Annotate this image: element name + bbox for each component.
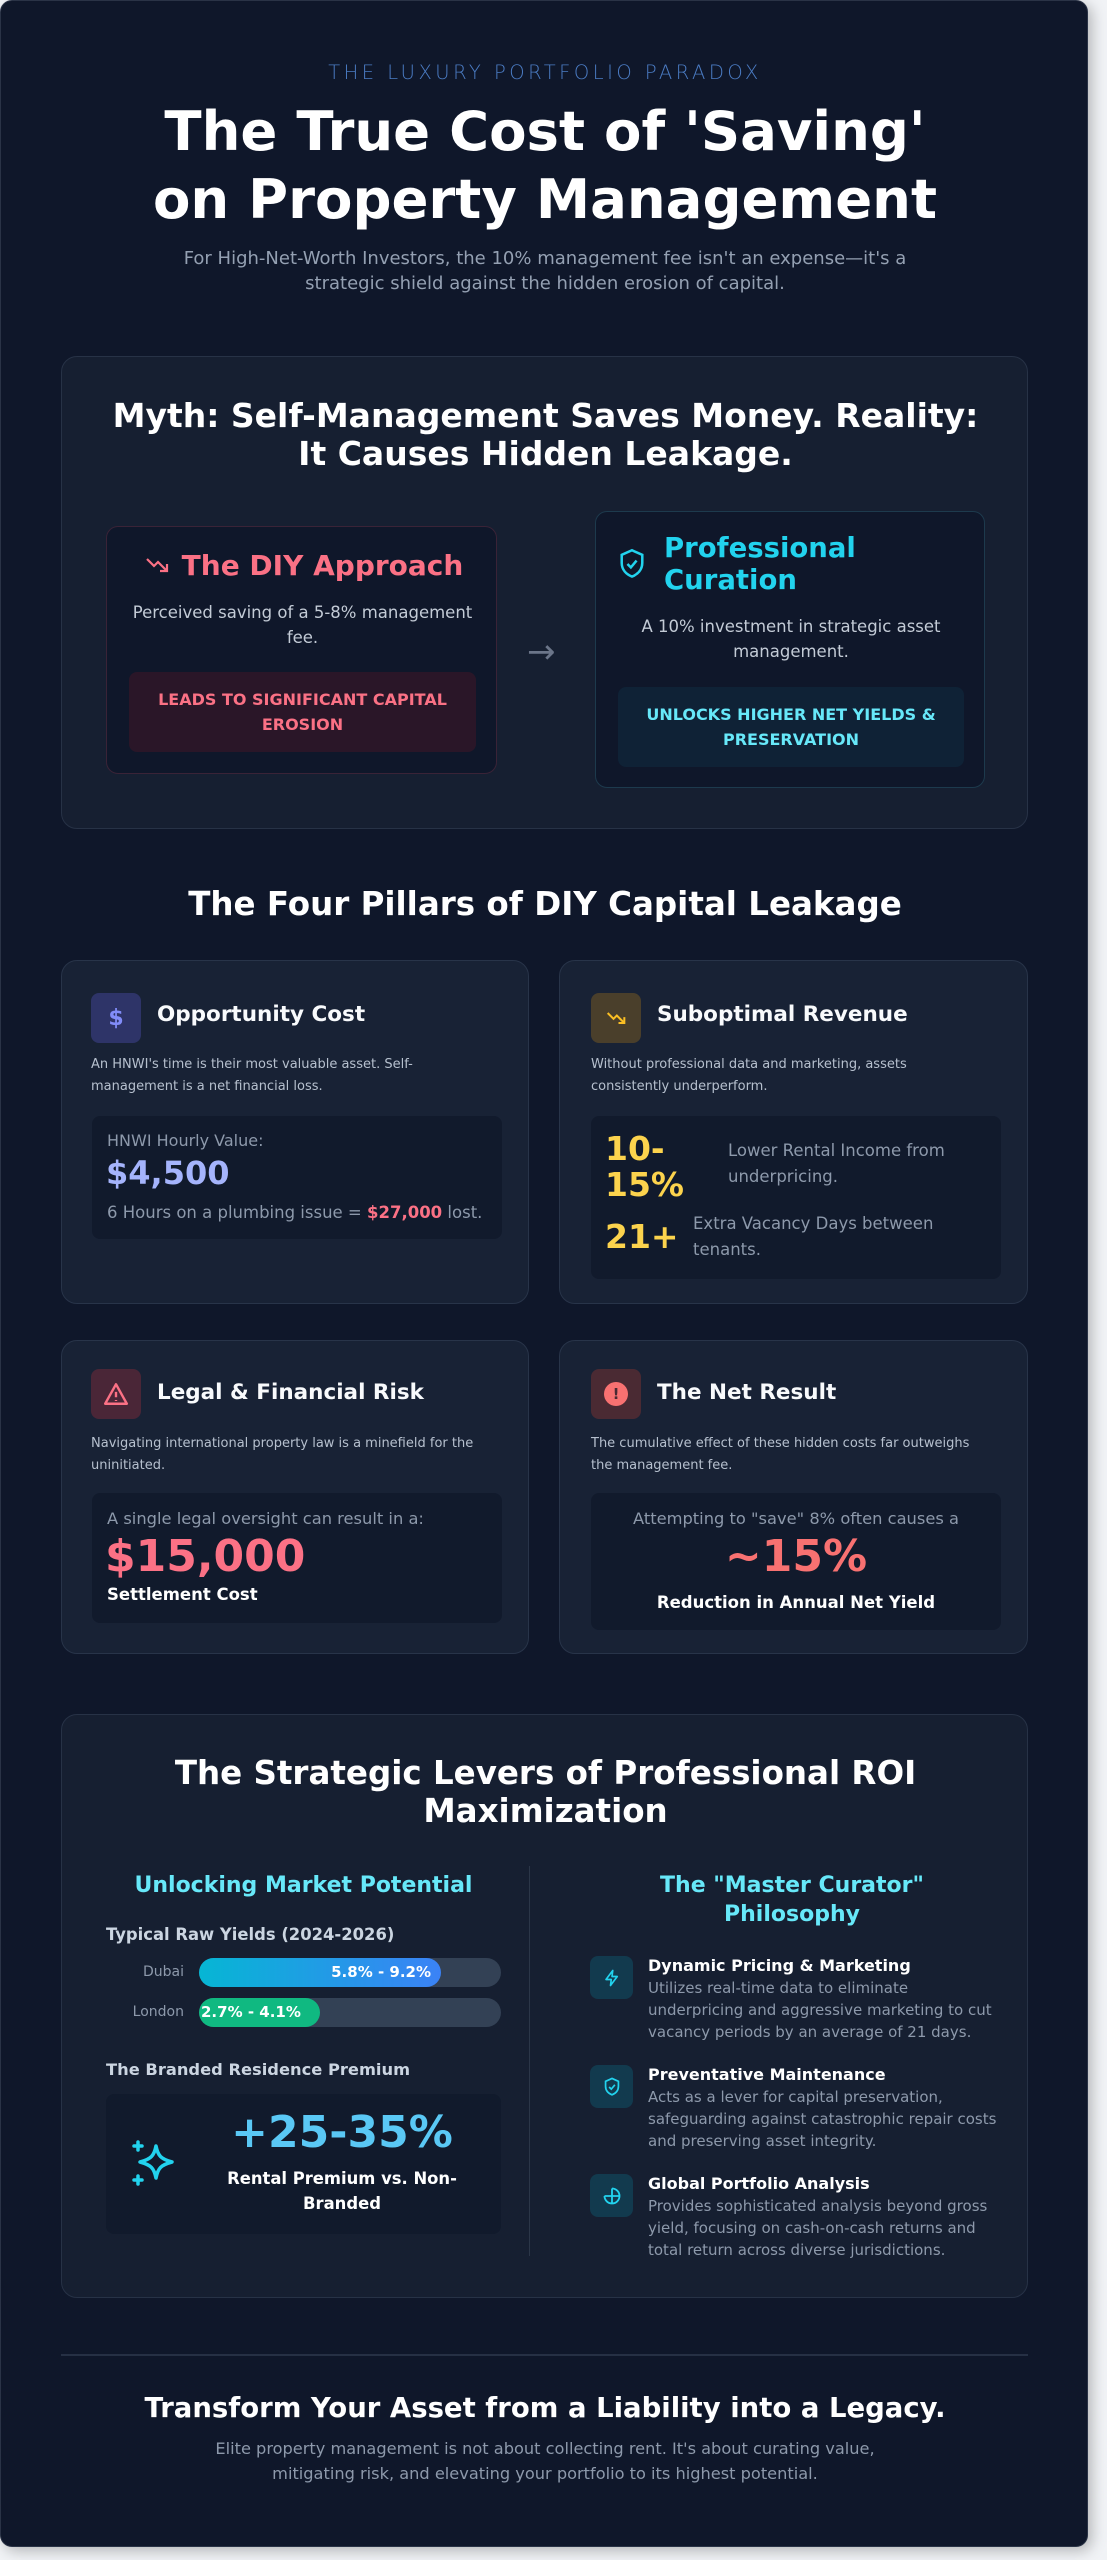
footer text (215, 2439, 875, 2483)
title: The Net Result (657, 1380, 836, 1405)
footer text: mitigating risk, and elevating your portfolio to its highest potential. (272, 2464, 818, 2483)
item: global portfolio: Global Portfolio Analysis (648, 2174, 870, 2193)
DIY tag (129, 672, 476, 752)
icon: dollar: $ (108, 1006, 124, 1030)
stat box: 21+ (605, 1217, 679, 1256)
title: on Property Management (153, 167, 937, 231)
stat box: tenants. (693, 1240, 761, 1259)
item: preventative maintenance: Acts as a lever for capital preservation, safeguarding against catastrophic repair costs and preserving asset integrity. (648, 2088, 996, 2150)
item: global portfolio: Provides sophisticated analysis beyond gross yield, focusing on cash-on-cash returns and total return across diverse jurisdictions. (648, 2197, 987, 2259)
panel: net result (559, 1340, 1028, 1654)
column heading: The "Master Curator" (660, 1873, 924, 1898)
premium box: Rental Premium vs. Non- (227, 2169, 457, 2188)
eyebrow label: THE LUXURY PORTFOLIO PARADOX (328, 61, 762, 84)
yields label: Typical Raw Yields (2024-2026) (106, 1925, 394, 1944)
pro title (664, 532, 856, 596)
column heading: Philosophy (724, 1902, 860, 1927)
myth heading (113, 396, 978, 473)
bar chart: Dubai (143, 1964, 184, 1980)
icon: shield (590, 2065, 633, 2108)
icon: alert: ! (613, 1385, 619, 1403)
icon: lightning (590, 1956, 633, 1999)
panel: opportunity cost (61, 960, 529, 1304)
stat box (92, 1493, 502, 1623)
desc: Navigating international property law is a minefield for the uninitiated. (91, 1436, 473, 1473)
stat box: Reduction in Annual Net Yield (657, 1593, 935, 1612)
title: Opportunity Cost (157, 1002, 365, 1027)
stat box: underpricing. (728, 1167, 838, 1186)
premium box: +25-35% (231, 2107, 453, 2158)
desc: Without professional data and marketing, assets consistently underperform. (591, 1057, 907, 1094)
bar chart (133, 1958, 501, 2027)
panel: legal risk (61, 1340, 529, 1654)
DIY tag: EROSION (262, 715, 343, 734)
title: Legal & Financial Risk (157, 1380, 424, 1405)
subtitle (184, 248, 906, 294)
item: preventative maintenance (590, 2065, 996, 2150)
divider line (529, 1866, 530, 2256)
icon: dollar (91, 993, 141, 1043)
bar chart: 2.7% - 4.1% (201, 2003, 301, 2021)
pro text: A 10% investment in strategic asset management. (641, 617, 941, 661)
bar chart: London (133, 2004, 184, 2020)
stat box: Attempting to "save" 8% often causes a (633, 1509, 959, 1528)
icon: trend down (591, 993, 641, 1043)
pro tag (618, 687, 964, 767)
panel: myth vs reality (61, 356, 1028, 829)
branded label: The Branded Residence Premium (106, 2060, 410, 2079)
stat box: $4,500 (106, 1154, 229, 1192)
arrow: → (527, 632, 556, 672)
shield icon (620, 548, 644, 578)
item: preventative maintenance: Preventative Maintenance (648, 2065, 886, 2084)
stat box: $15,000 (105, 1531, 305, 1582)
desc: The cumulative effect of these hidden costs far outweighs the management fee. (591, 1436, 969, 1473)
heading (175, 1754, 916, 1830)
title: Suboptimal Revenue (657, 1002, 908, 1027)
icon: alert (591, 1369, 641, 1419)
stat box: A single legal oversight can result in a: (107, 1509, 424, 1528)
item: dynamic pricing: Utilizes real-time data to eliminate underpricing and aggressive marketing to cut vacancy periods by an average of 21 days. (648, 1979, 992, 2041)
footer heading: Transform Your Asset from a Liability into a Legacy. (144, 2392, 946, 2424)
stat box: Extra Vacancy Days between (693, 1214, 933, 1233)
footer text: Elite property management is not about collecting rent. It's about curating value, (215, 2439, 875, 2458)
heading: Maximization (423, 1792, 668, 1830)
myth heading: It Causes Hidden Leakage. (298, 434, 793, 473)
item: dynamic pricing (590, 1956, 992, 2041)
title (153, 99, 937, 231)
desc: An HNWI's time is their most valuable asset. Self-management is a net financial loss. (91, 1057, 413, 1094)
stat box: 6 Hours on a plumbing issue = $27,000 lost. (107, 1203, 482, 1222)
right column: master curator (590, 1873, 996, 2259)
stat box: 15% (605, 1165, 684, 1204)
title: The True Cost of 'Saving' (164, 99, 926, 163)
column heading (660, 1873, 924, 1927)
column heading: Unlocking Market Potential (134, 1873, 472, 1898)
icon: globe (590, 2174, 633, 2217)
pro title: Curation (664, 564, 797, 596)
icon: warning (91, 1369, 141, 1419)
stat box: ~15% (725, 1531, 867, 1582)
icon: sparkle (132, 2140, 174, 2186)
stat box: HNWI Hourly Value: (107, 1131, 264, 1150)
DIY box (106, 526, 497, 774)
stat box: 10- (605, 1129, 665, 1168)
DIY title with icon: The DIY Approach (182, 549, 463, 582)
panel: strategic levers (61, 1714, 1028, 2298)
subtitle: For High-Net-Worth Investors, the 10% management fee isn't an expense—it's a (184, 248, 906, 269)
premium box (106, 2094, 501, 2234)
DIY tag: LEADS TO SIGNIFICANT CAPITAL (158, 690, 447, 709)
subtitle: strategic shield against the hidden erosion of capital. (305, 273, 785, 294)
pro tag: UNLOCKS HIGHER NET YIELDS & (646, 705, 936, 724)
pro title: Professional (664, 532, 856, 564)
left column: market potential (106, 1873, 501, 2213)
professional box (595, 511, 985, 788)
premium box: Branded (303, 2194, 381, 2213)
item: global portfolio (590, 2174, 987, 2259)
panel: suboptimal revenue (559, 960, 1028, 1304)
stat box (591, 1493, 1001, 1630)
myth heading: Myth: Self-Management Saves Money. Reality: (113, 396, 978, 435)
heading: The Strategic Levers of Professional ROI (175, 1754, 916, 1792)
bar chart: 5.8% - 9.2% (331, 1963, 431, 1981)
item: dynamic pricing: Dynamic Pricing & Marketing (648, 1956, 911, 1975)
stat box (591, 1116, 1001, 1279)
stat box: Settlement Cost (107, 1585, 258, 1604)
heading: four pillars: The Four Pillars of DIY Capital Leakage (188, 885, 902, 923)
pro tag: PRESERVATION (723, 730, 859, 749)
stat box (92, 1116, 502, 1239)
stat box: Lower Rental Income from (728, 1141, 945, 1160)
DIY text: Perceived saving of a 5-8% management fee. (133, 603, 472, 647)
